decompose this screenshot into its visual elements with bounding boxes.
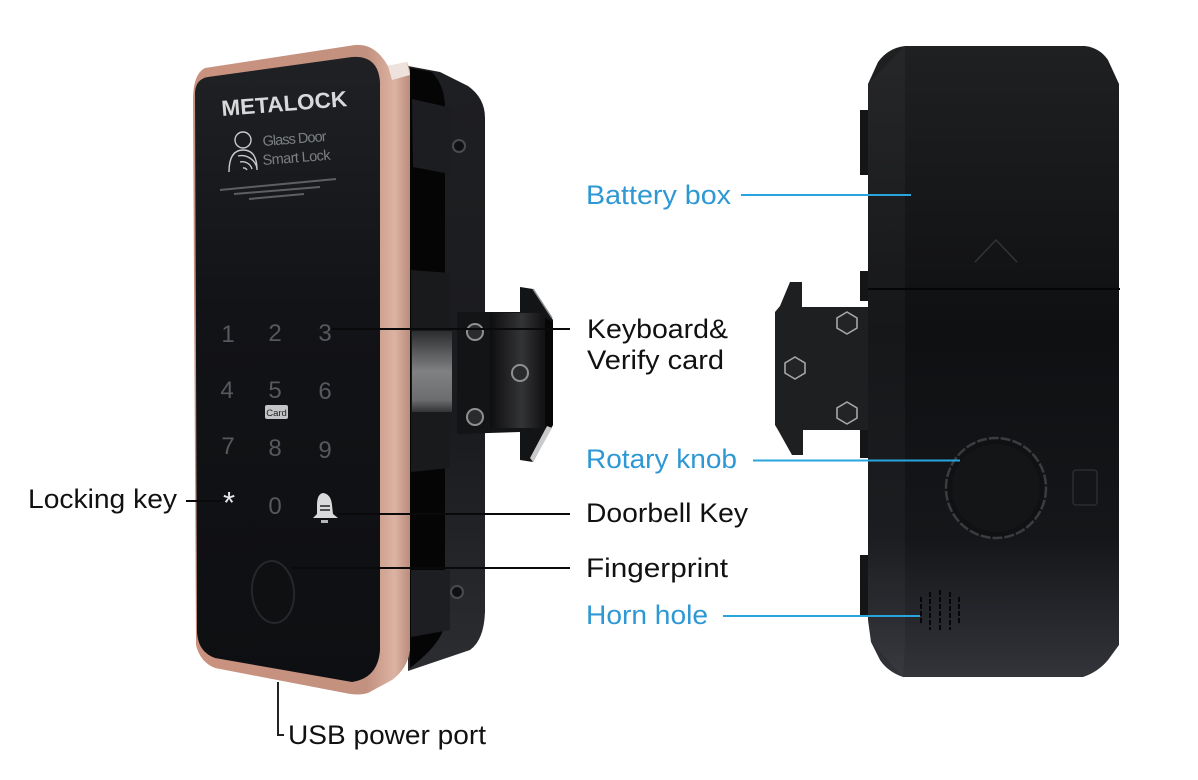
bezel highlight: [388, 62, 410, 80]
arrow mark: [975, 240, 1017, 262]
latch bracket: [457, 287, 553, 462]
lock rear housing: [408, 66, 485, 671]
callout: Rotary knob: Rotary knob: [586, 444, 737, 474]
rose gold bezel: [193, 45, 410, 694]
side tabs: [860, 110, 869, 615]
keypad digits: 9: [318, 437, 332, 464]
middle clip: [411, 270, 450, 472]
small sensor window: [1073, 470, 1097, 505]
decorative stripes: [220, 179, 336, 199]
callout: Locking key: Locking key: [28, 484, 178, 514]
keypad digits: [220, 320, 332, 520]
latch plate: [775, 282, 868, 455]
battery cover seam: [868, 288, 1120, 290]
keypad digits: 1: [221, 321, 235, 348]
callout: Battery box: Battery box: [586, 180, 732, 210]
black keypad face: [195, 57, 380, 682]
fingerprint sensor: [249, 559, 297, 625]
card badge: Card: [266, 408, 287, 419]
back body: [868, 46, 1119, 677]
speaker holes: [921, 590, 959, 632]
callout: Horn hole: Horn hole: [586, 600, 708, 630]
callout: Keyboard & Verify card: Keyboard&: [587, 314, 728, 344]
callout: Doorbell Key: Doorbell Key: [586, 498, 749, 528]
locking key asterisk: *: [223, 485, 235, 520]
product name: Glass Door: [262, 129, 327, 150]
keypad digits: 4: [220, 377, 234, 404]
keypad digits: 3: [318, 320, 332, 347]
upper clip: [412, 99, 452, 174]
callout: Keyboard & Verify card: [332, 314, 728, 375]
rotary knob: [946, 438, 1046, 538]
product name: Smart Lock: [262, 148, 332, 169]
callout: USB power port: USB power port: [288, 720, 487, 750]
product name: [262, 129, 332, 169]
keypad digits: 2: [268, 320, 282, 347]
mounting slot: [410, 68, 445, 668]
keypad digits: 6: [318, 378, 332, 405]
callout: Keyboard & Verify card: Verify card: [587, 345, 724, 375]
callout: USB power port: [278, 682, 487, 750]
lower clip: [411, 570, 450, 637]
keypad digits: 7: [221, 433, 235, 460]
back view lock: [775, 46, 1120, 677]
keypad digits: 8: [268, 435, 282, 462]
chrome latch bar: [412, 331, 452, 412]
keypad digits: 5: [268, 377, 282, 404]
icon: person with wireless signal: [229, 132, 257, 172]
keypad digits: 0: [268, 493, 282, 520]
callout: Fingerprint: Fingerprint: [586, 553, 729, 583]
logo: METALOCK: METALOCK: [220, 86, 348, 121]
front lock: [193, 45, 553, 694]
facet shading: [868, 46, 905, 677]
housing screws: [451, 140, 465, 598]
icon: doorbell: [313, 493, 338, 523]
